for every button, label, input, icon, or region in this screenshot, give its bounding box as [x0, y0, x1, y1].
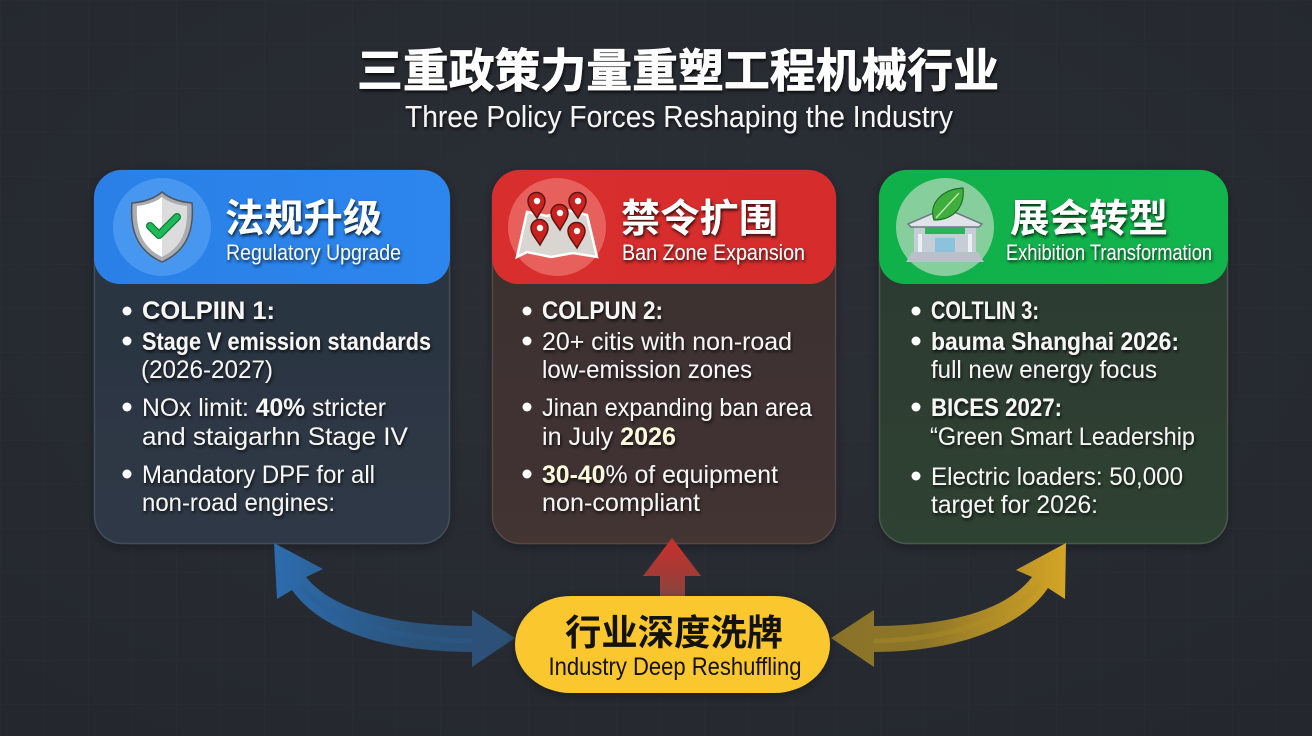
header title: 法规升级: [225, 188, 382, 244]
bullet list: exhibition transformation: Electric loaders: 50,000: [931, 463, 1183, 491]
bullet list: regulatory upgrade: non-road engines:: [142, 489, 335, 517]
bullet list: exhibition transformation: target for 2026:: [931, 491, 1098, 519]
arrow: blue double-headed: [274, 543, 515, 667]
bullet list: exhibition transformation: “Green Smart Leadership: [930, 423, 1195, 451]
bullet list: exhibition transformation: BICES 2027:: [931, 394, 1062, 422]
icon: shield with check mark: [113, 178, 211, 276]
bullet list: ban zone expansion: COLPUN 2:: [542, 297, 663, 325]
bullet list: regulatory upgrade: (2026-2027): [141, 356, 273, 384]
arrow: red upward: [643, 538, 701, 598]
bullet list: exhibition transformation: [912, 297, 1195, 519]
icon: exhibition hall with leaf: [896, 178, 994, 276]
header title: 禁令扩围: [621, 188, 778, 244]
arrow: yellow double-headed: [831, 543, 1066, 667]
subtitle: Three Policy Forces Reshaping the Industry: [405, 99, 953, 134]
header: regulatory upgrade: [94, 170, 450, 284]
icon: map with pins: [508, 178, 606, 276]
bullet list: exhibition transformation: bauma Shanghai 2026:: [931, 328, 1179, 356]
bullet list: regulatory upgrade: and staigarhn Stage IV: [142, 423, 408, 451]
bullet list: ban zone expansion: in July 2026: [542, 423, 676, 451]
header subtitle: Ban Zone Expansion: [622, 240, 805, 265]
bullet list: exhibition transformation: COLTLIN 3:: [931, 297, 1039, 325]
header title: 展会转型: [1010, 188, 1168, 244]
bullet list: ban zone expansion: [522, 297, 812, 517]
header: exhibition transformation: [879, 170, 1228, 284]
title: [357, 35, 999, 134]
bullet list: ban zone expansion: Jinan expanding ban area: [542, 394, 812, 422]
panel: ban zone expansion: [492, 170, 836, 544]
header subtitle: Exhibition Transformation: [1006, 240, 1212, 265]
bullet list: ban zone expansion: low-emission zones: [542, 356, 752, 384]
bullet list: ban zone expansion: 30-40% of equipment: [542, 461, 778, 489]
bullet list: regulatory upgrade: COLPIIN 1:: [142, 297, 275, 325]
bullet list: regulatory upgrade: NOx limit: 40% stricter: [142, 394, 386, 422]
bullet list: regulatory upgrade: [122, 297, 431, 517]
header: ban zone expansion: [492, 170, 836, 284]
bullet list: regulatory upgrade: Mandatory DPF for all: [142, 461, 375, 489]
header subtitle: Regulatory Upgrade: [226, 240, 401, 265]
center pill: industry deep reshuffling: [515, 596, 830, 693]
panel: regulatory upgrade: [94, 170, 450, 544]
bullet list: ban zone expansion: 20+ citis with non-road: [542, 328, 792, 356]
panel: exhibition transformation: [879, 170, 1228, 544]
bullet list: ban zone expansion: non-compliant: [542, 489, 700, 517]
bullet list: exhibition transformation: full new energy focus: [931, 356, 1157, 384]
pill subtitle: Industry Deep Reshuffling: [548, 653, 802, 681]
title: 三重政策力量重塑工程机械行业: [357, 35, 999, 101]
bullet list: regulatory upgrade: Stage V emission standards: [142, 328, 431, 356]
pill title: 行业深度洗牌: [565, 604, 783, 656]
